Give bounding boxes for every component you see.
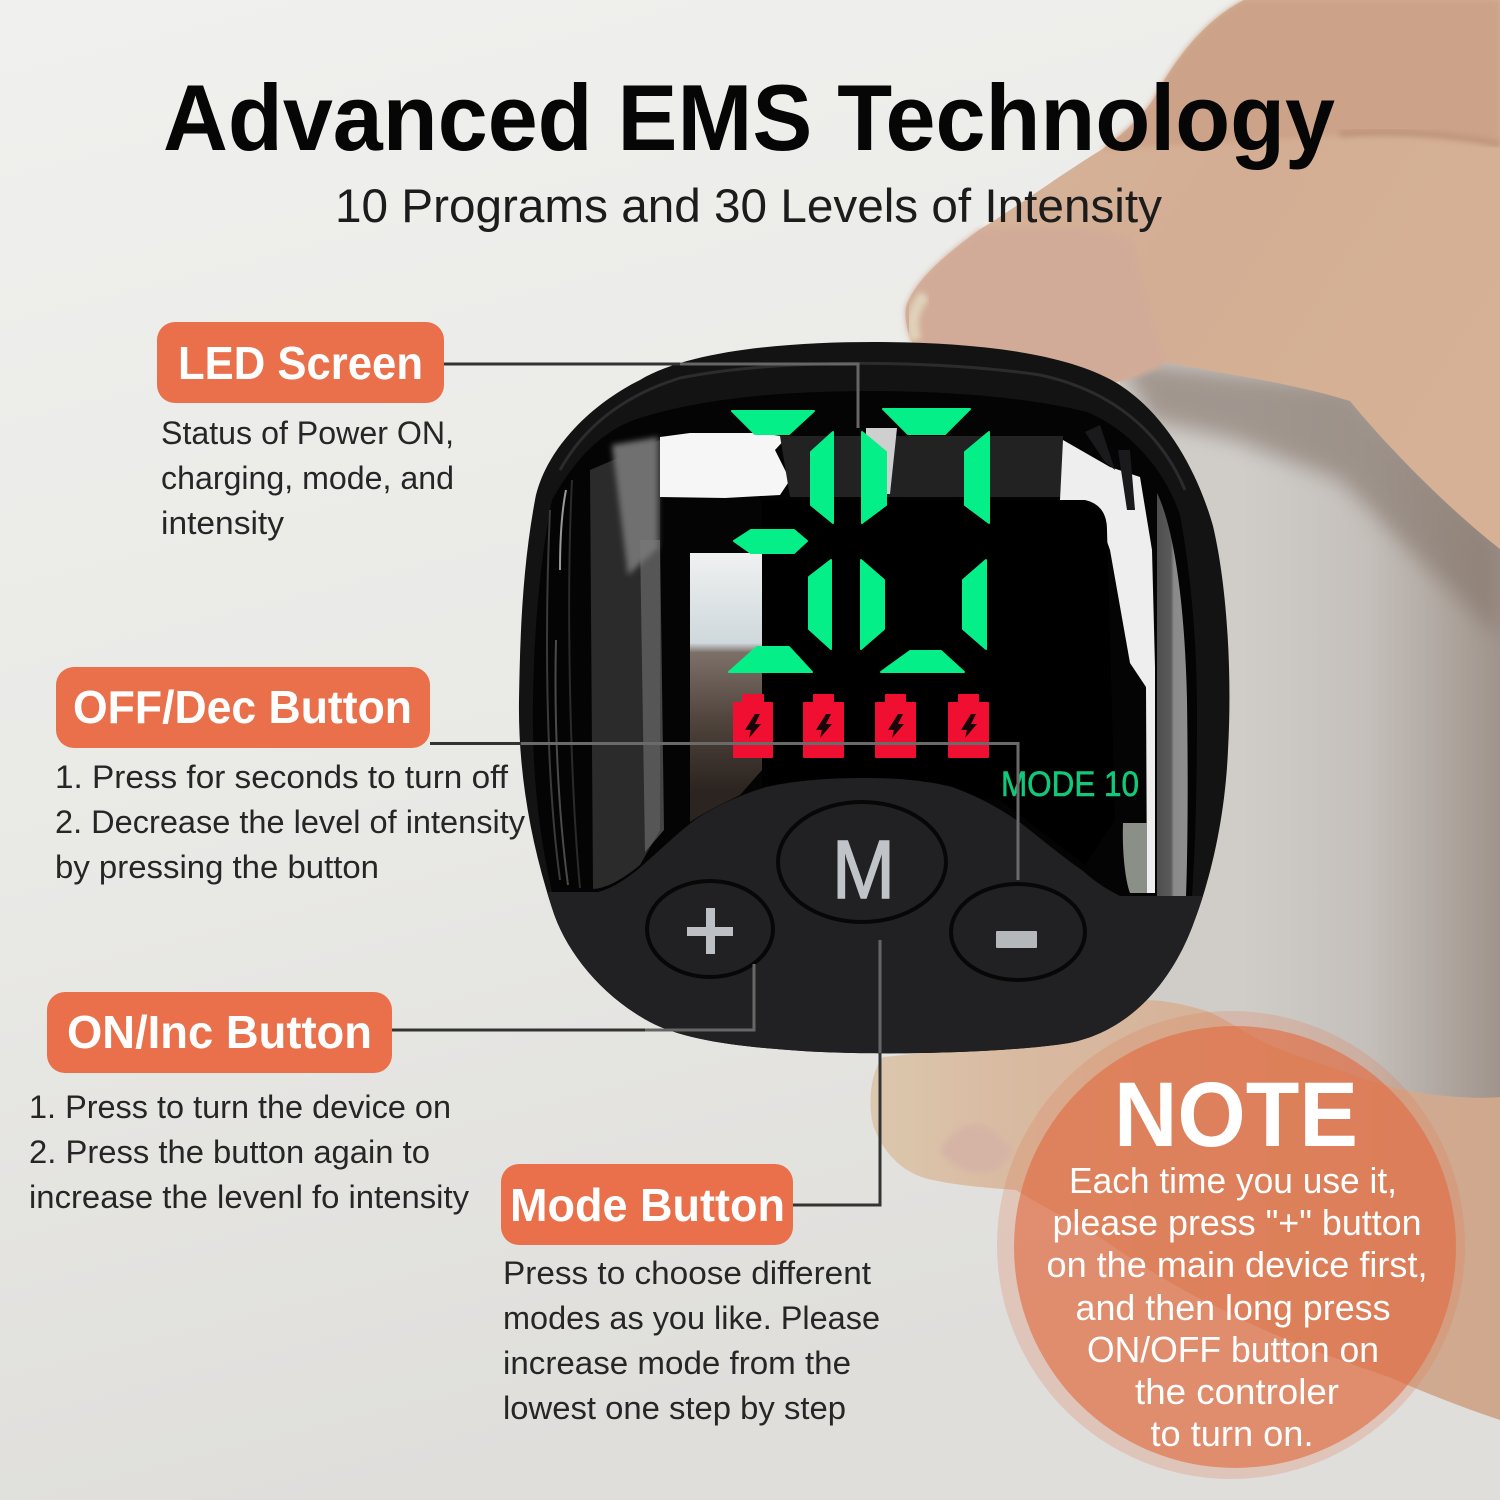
text: Mode description: Press to choose different — [503, 1255, 871, 1291]
subtitle: 10 Programs and 30 Levels of Intensity — [335, 179, 1162, 232]
fingertip edge — [913, 295, 925, 340]
text: LED Screen description: intensity — [161, 505, 284, 541]
callout: OFF/Dec Button — [55, 667, 525, 885]
line: LED screen — [444, 364, 858, 428]
text: Mode description — [503, 1255, 880, 1426]
device ridge — [560, 363, 1185, 490]
centre white glint — [866, 428, 897, 494]
mode button — [778, 802, 946, 922]
finger crease — [1340, 132, 1500, 144]
fingertip — [905, 227, 1168, 382]
first digit — [729, 411, 833, 672]
text: ON/Inc description: increase the levenl fo intensity — [29, 1179, 469, 1215]
text: ON/Inc description: 2. Press the button again to — [29, 1134, 430, 1170]
text: Mode description: lowest one step by step — [503, 1390, 846, 1426]
mode button: M — [832, 823, 895, 916]
text: LED Screen description: Status of Power ON, — [161, 415, 454, 451]
left light streak — [640, 540, 664, 852]
note outer halo — [997, 1011, 1465, 1479]
shadow under fingers — [1120, 360, 1500, 640]
label: Mode Button: Mode Button — [510, 1179, 785, 1231]
callout: LED Screen — [157, 322, 454, 541]
label: LED Screen: LED Screen — [178, 337, 423, 389]
upper finger shading — [1101, 0, 1500, 150]
hand: lower thumb — [870, 1000, 1500, 1420]
note heading: NOTE — [1114, 1064, 1358, 1166]
battery icons — [734, 695, 988, 757]
white reflection — [660, 433, 790, 498]
label: LED Screen — [157, 322, 444, 403]
label: OFF/Dec Button — [56, 667, 430, 748]
device — [518, 342, 1230, 1054]
note callout — [997, 1011, 1465, 1479]
text: OFF/Dec description — [55, 759, 525, 885]
plus button — [647, 881, 773, 977]
glossy screen — [533, 391, 1197, 896]
leader lines — [392, 364, 1018, 1205]
minus button — [951, 884, 1085, 980]
right white reflection — [1060, 440, 1155, 893]
thumbnail — [940, 1124, 1012, 1173]
note text: on the main device first, — [1046, 1244, 1428, 1285]
note text: the controler — [1135, 1371, 1339, 1412]
note text: to turn on. — [1150, 1413, 1314, 1454]
note text — [1046, 1160, 1428, 1454]
text: OFF/Dec description: 1. Press for seconds to turn off — [55, 759, 508, 795]
text: OFF/Dec description: by pressing the button — [55, 849, 379, 885]
text: ON/Inc description: 1. Press to turn the device on — [29, 1089, 451, 1125]
text: Mode description: modes as you like. Please — [503, 1300, 880, 1336]
text: Mode description: increase mode from the — [503, 1345, 851, 1381]
second digit — [861, 409, 989, 672]
line: ON/Inc — [392, 964, 754, 1030]
right dark gaps — [1085, 425, 1135, 510]
text: OFF/Dec description: 2. Decrease the level of intensity — [55, 804, 525, 840]
text: LED Screen description — [161, 415, 454, 541]
title: Advanced EMS Technology — [163, 65, 1335, 170]
note inner circle — [1014, 1026, 1456, 1468]
hand: upper finger and palm — [905, 0, 1500, 549]
lower-left reflection — [690, 553, 762, 822]
note text: Each time you use it, — [1069, 1160, 1397, 1201]
upper left grey reflection — [612, 437, 658, 575]
label: OFF/Dec Button: OFF/Dec Button — [73, 681, 412, 733]
label: Mode Button — [501, 1164, 793, 1245]
text: LED Screen description: charging, mode, and — [161, 460, 454, 496]
line: Mode — [793, 940, 880, 1205]
background shadow right of device — [1120, 345, 1500, 1120]
LED digits — [729, 409, 989, 672]
centre reflection — [780, 436, 1063, 497]
note text: please press "+" button — [1052, 1202, 1422, 1243]
callout: Mode Button — [501, 1164, 880, 1426]
label: ON/Inc Button — [47, 992, 392, 1073]
right lower reflection — [1123, 823, 1147, 893]
note text: and then long press — [1076, 1287, 1390, 1328]
right grey band — [1157, 493, 1188, 896]
text: ON/Inc description — [29, 1089, 469, 1215]
control panel — [547, 778, 1203, 1054]
mode label: MODE 10 — [1001, 765, 1139, 804]
device body — [519, 342, 1229, 1053]
left edge streaks — [547, 480, 580, 888]
label: ON/Inc Button: ON/Inc Button — [67, 1006, 372, 1058]
black reflection panel — [762, 500, 1115, 865]
left grey reflection — [590, 440, 660, 889]
callout: ON/Inc Button — [29, 992, 469, 1215]
line: OFF/Dec — [430, 744, 1018, 880]
note text: ON/OFF button on — [1087, 1329, 1379, 1370]
